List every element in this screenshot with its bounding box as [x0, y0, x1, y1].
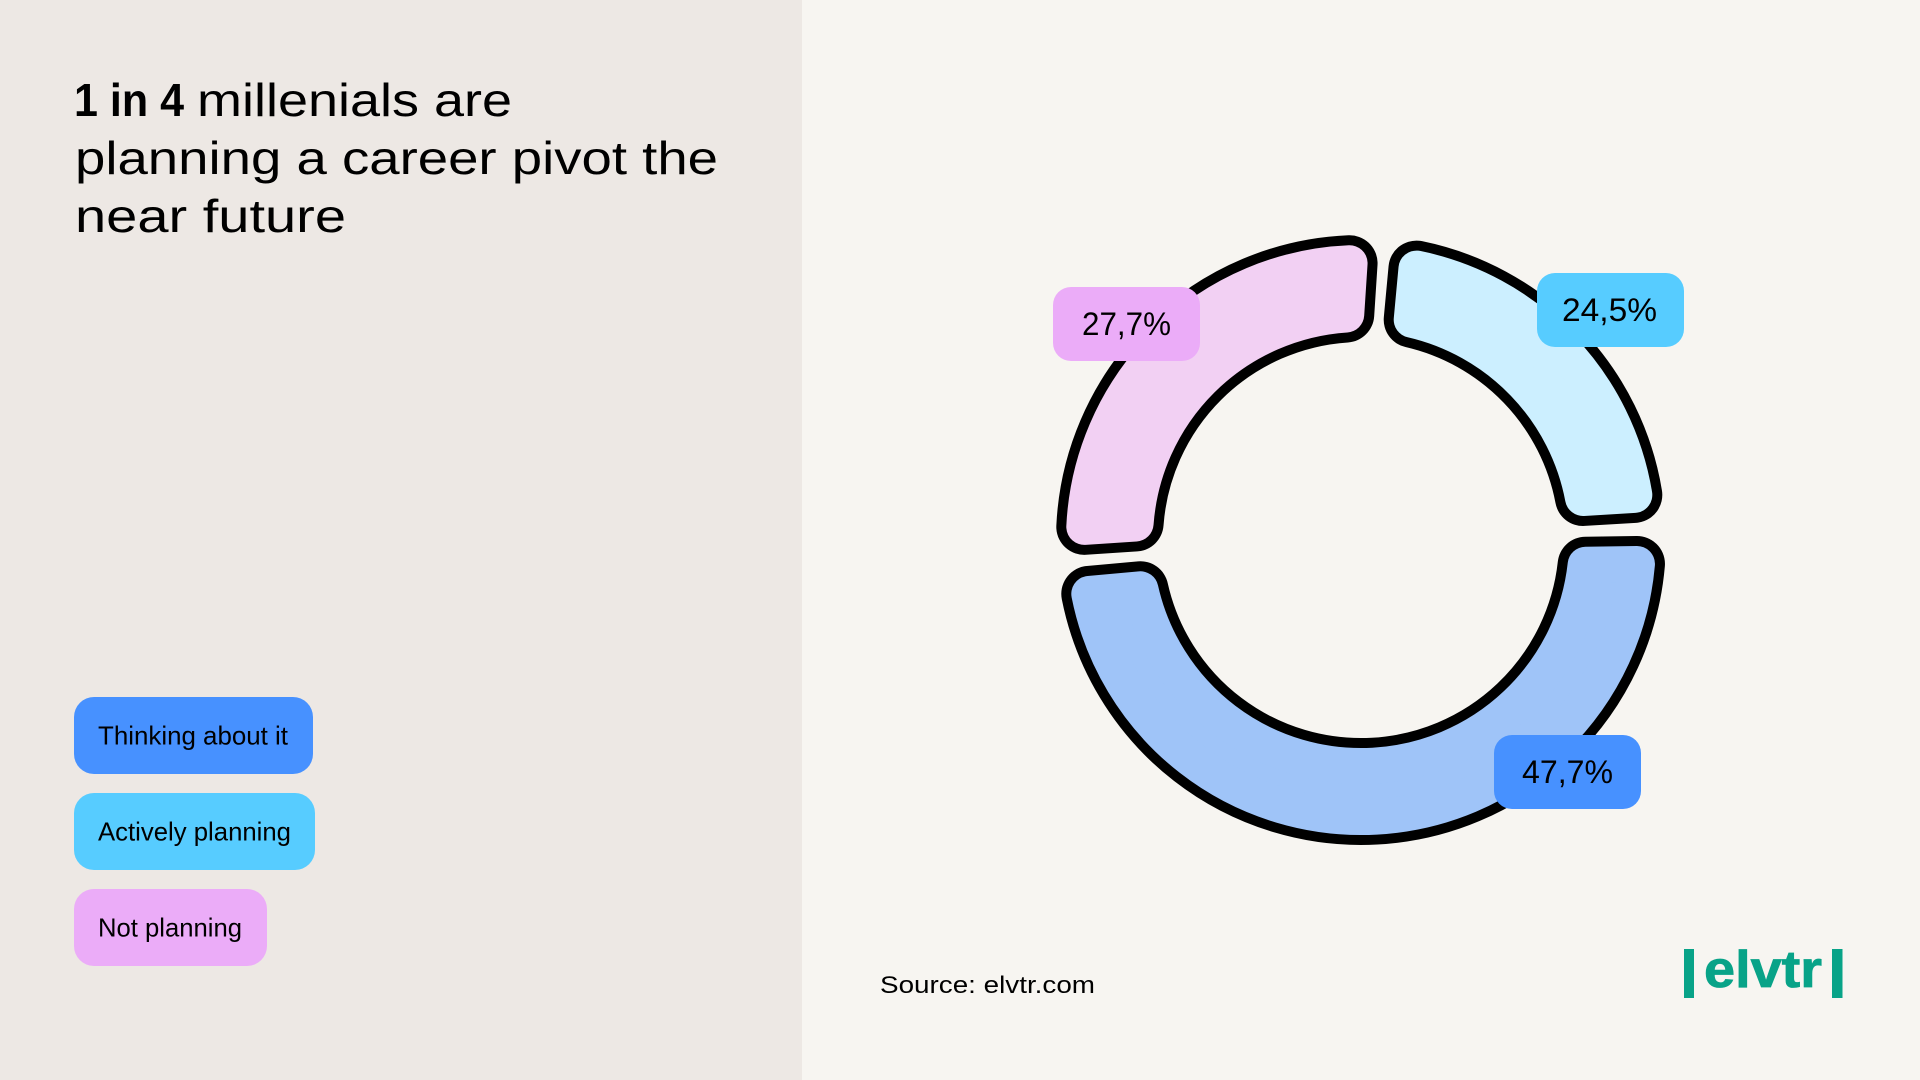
value label: 27,7%: 27,7% — [1082, 306, 1171, 342]
segment: thinking about it 47,7% — [1089, 564, 1637, 817]
title: 1 in 4 — [74, 74, 184, 126]
value label: 47,7%: 47,7% — [1522, 754, 1613, 790]
value label: 27,7% — [1053, 287, 1200, 361]
value label: 47,7% — [1494, 735, 1641, 809]
legend item: actively planning — [74, 793, 315, 870]
legend item: not planning — [74, 889, 267, 966]
value label: 24,5% — [1537, 273, 1684, 347]
legend item: not planning: Not planning — [98, 914, 242, 942]
title: near future — [75, 190, 346, 242]
source note: Source: elvtr.com — [880, 972, 1095, 999]
legend item: actively planning: Actively planning — [98, 818, 291, 846]
logo: elvtr: elvtr — [1704, 941, 1822, 999]
segment: not planning 27,7% — [1084, 263, 1350, 527]
title: millenials are — [197, 74, 512, 126]
title: planning a career pivot the — [75, 132, 718, 184]
donut chart — [1084, 263, 1637, 817]
legend — [74, 697, 315, 966]
panel: left background — [0, 0, 802, 1080]
legend item: thinking about it: Thinking about it — [98, 722, 288, 750]
title — [74, 74, 718, 242]
legend item: thinking about it — [74, 697, 313, 774]
segment: actively planning 24,5% — [1412, 269, 1634, 498]
value label: 24,5%: 24,5% — [1562, 292, 1657, 328]
logo: elvtr — [1684, 941, 1842, 999]
